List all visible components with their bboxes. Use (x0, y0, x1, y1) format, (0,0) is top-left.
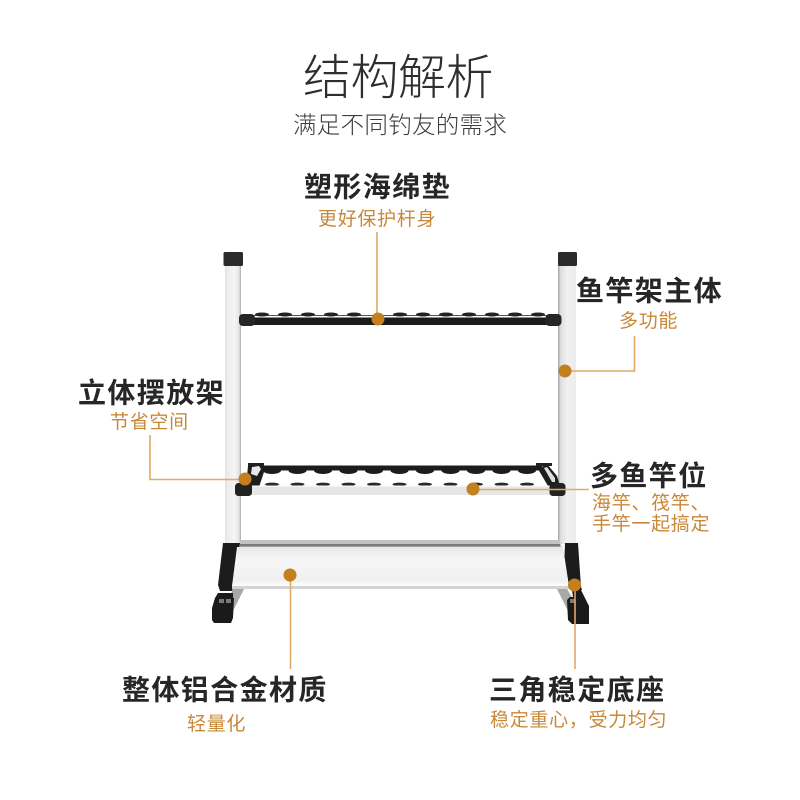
leader line (150, 435, 245, 480)
heading: 三角稳定底座 (489, 674, 665, 706)
callout: rack body (558, 276, 723, 378)
right leg and foot (556, 587, 574, 611)
dot (558, 364, 572, 378)
description: 稳定重心，受力均匀 (490, 709, 667, 731)
leader line (473, 488, 589, 490)
description: 节省空间 (110, 411, 189, 433)
dot (466, 482, 480, 496)
description: 更好保护杆身 (318, 208, 436, 230)
leader line (376, 232, 378, 319)
leader line (574, 585, 576, 669)
description: 海竿、筏竿、 (592, 492, 710, 514)
left post (224, 252, 243, 544)
title: 结构解析 (303, 52, 493, 105)
dot (372, 312, 384, 326)
description line 2: 手竿一起搞定 (592, 513, 710, 535)
dot (238, 472, 252, 486)
heading: 立体摆放架 (78, 378, 225, 408)
right post (558, 252, 577, 544)
leader line (290, 575, 292, 669)
dot (284, 568, 296, 582)
callout: aluminium (122, 568, 328, 735)
upper foam rack (239, 312, 562, 326)
heading: 鱼竿架主体 (576, 276, 723, 306)
description: 多功能 (619, 310, 678, 332)
left leg and foot (227, 587, 245, 611)
triangular base (212, 540, 589, 624)
heading: 整体铝合金材质 (122, 674, 328, 706)
heading: 多鱼竿位 (590, 460, 708, 492)
callout: triangular base (489, 578, 667, 731)
callout: multiple rod slots (466, 460, 710, 535)
callout: foam pad (304, 172, 451, 326)
fishing rod rack product (212, 252, 589, 624)
description: 轻量化 (187, 713, 246, 735)
lower foam rack (235, 463, 566, 496)
dot (568, 578, 581, 592)
heading: 塑形海绵垫 (304, 172, 451, 202)
leader line (565, 336, 634, 371)
subtitle: 满足不同钓友的需求 (293, 112, 507, 138)
callout: stereo display (78, 378, 252, 486)
aluminium panel (232, 547, 569, 586)
